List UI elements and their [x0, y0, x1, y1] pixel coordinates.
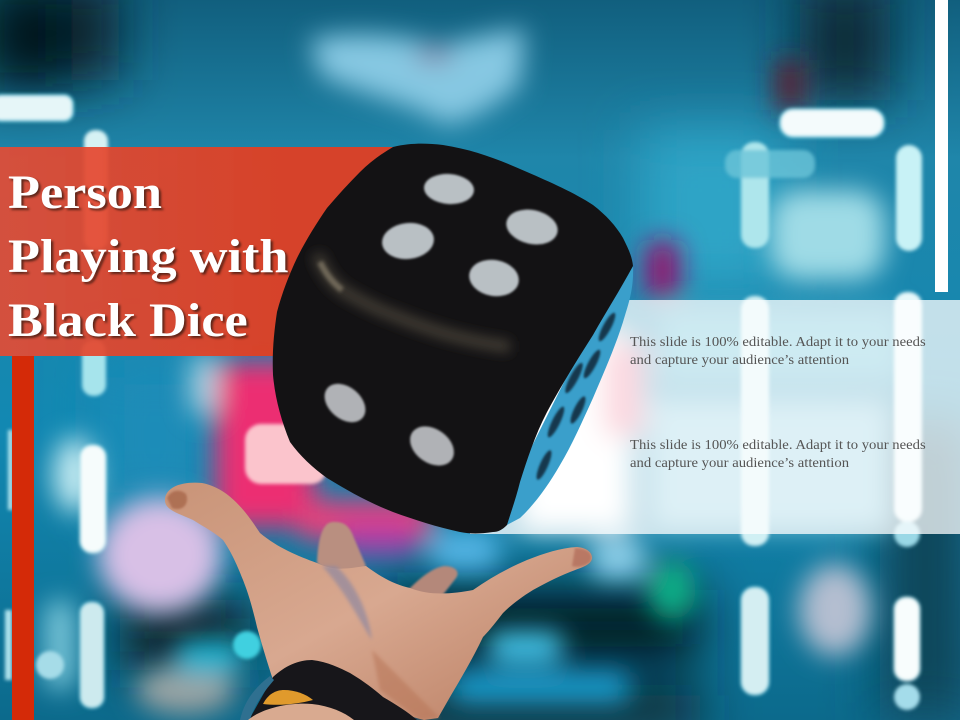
title: Person: [8, 166, 162, 219]
title: [8, 166, 290, 347]
translucent red title banner: [0, 147, 400, 356]
text block 2: and capture your audience’s attention: [630, 455, 849, 470]
dice pips: side face: [534, 311, 618, 481]
text block 1: and capture your audience’s attention: [630, 352, 849, 367]
white vertical bar: [935, 0, 948, 292]
icon: black dice: [273, 144, 633, 534]
red vertical bar: [12, 356, 34, 720]
text block 2: This slide is 100% editable. Adapt it to your needs: [630, 437, 926, 452]
text block 1: [630, 334, 926, 367]
dice pips: front face: [317, 376, 461, 474]
dice side face: [505, 266, 633, 526]
icon: wristwatch: [240, 660, 417, 720]
text block 1: This slide is 100% editable. Adapt it to your needs: [630, 334, 926, 349]
title: Black Dice: [8, 294, 248, 347]
translucent white text panel: [470, 300, 960, 534]
icon: hand: [165, 483, 592, 720]
text block 2: [630, 437, 926, 470]
title: Playing with: [8, 230, 289, 283]
dice body: [273, 144, 633, 534]
dice edge highlight: [317, 254, 510, 347]
dice pips: top face: [380, 172, 561, 300]
